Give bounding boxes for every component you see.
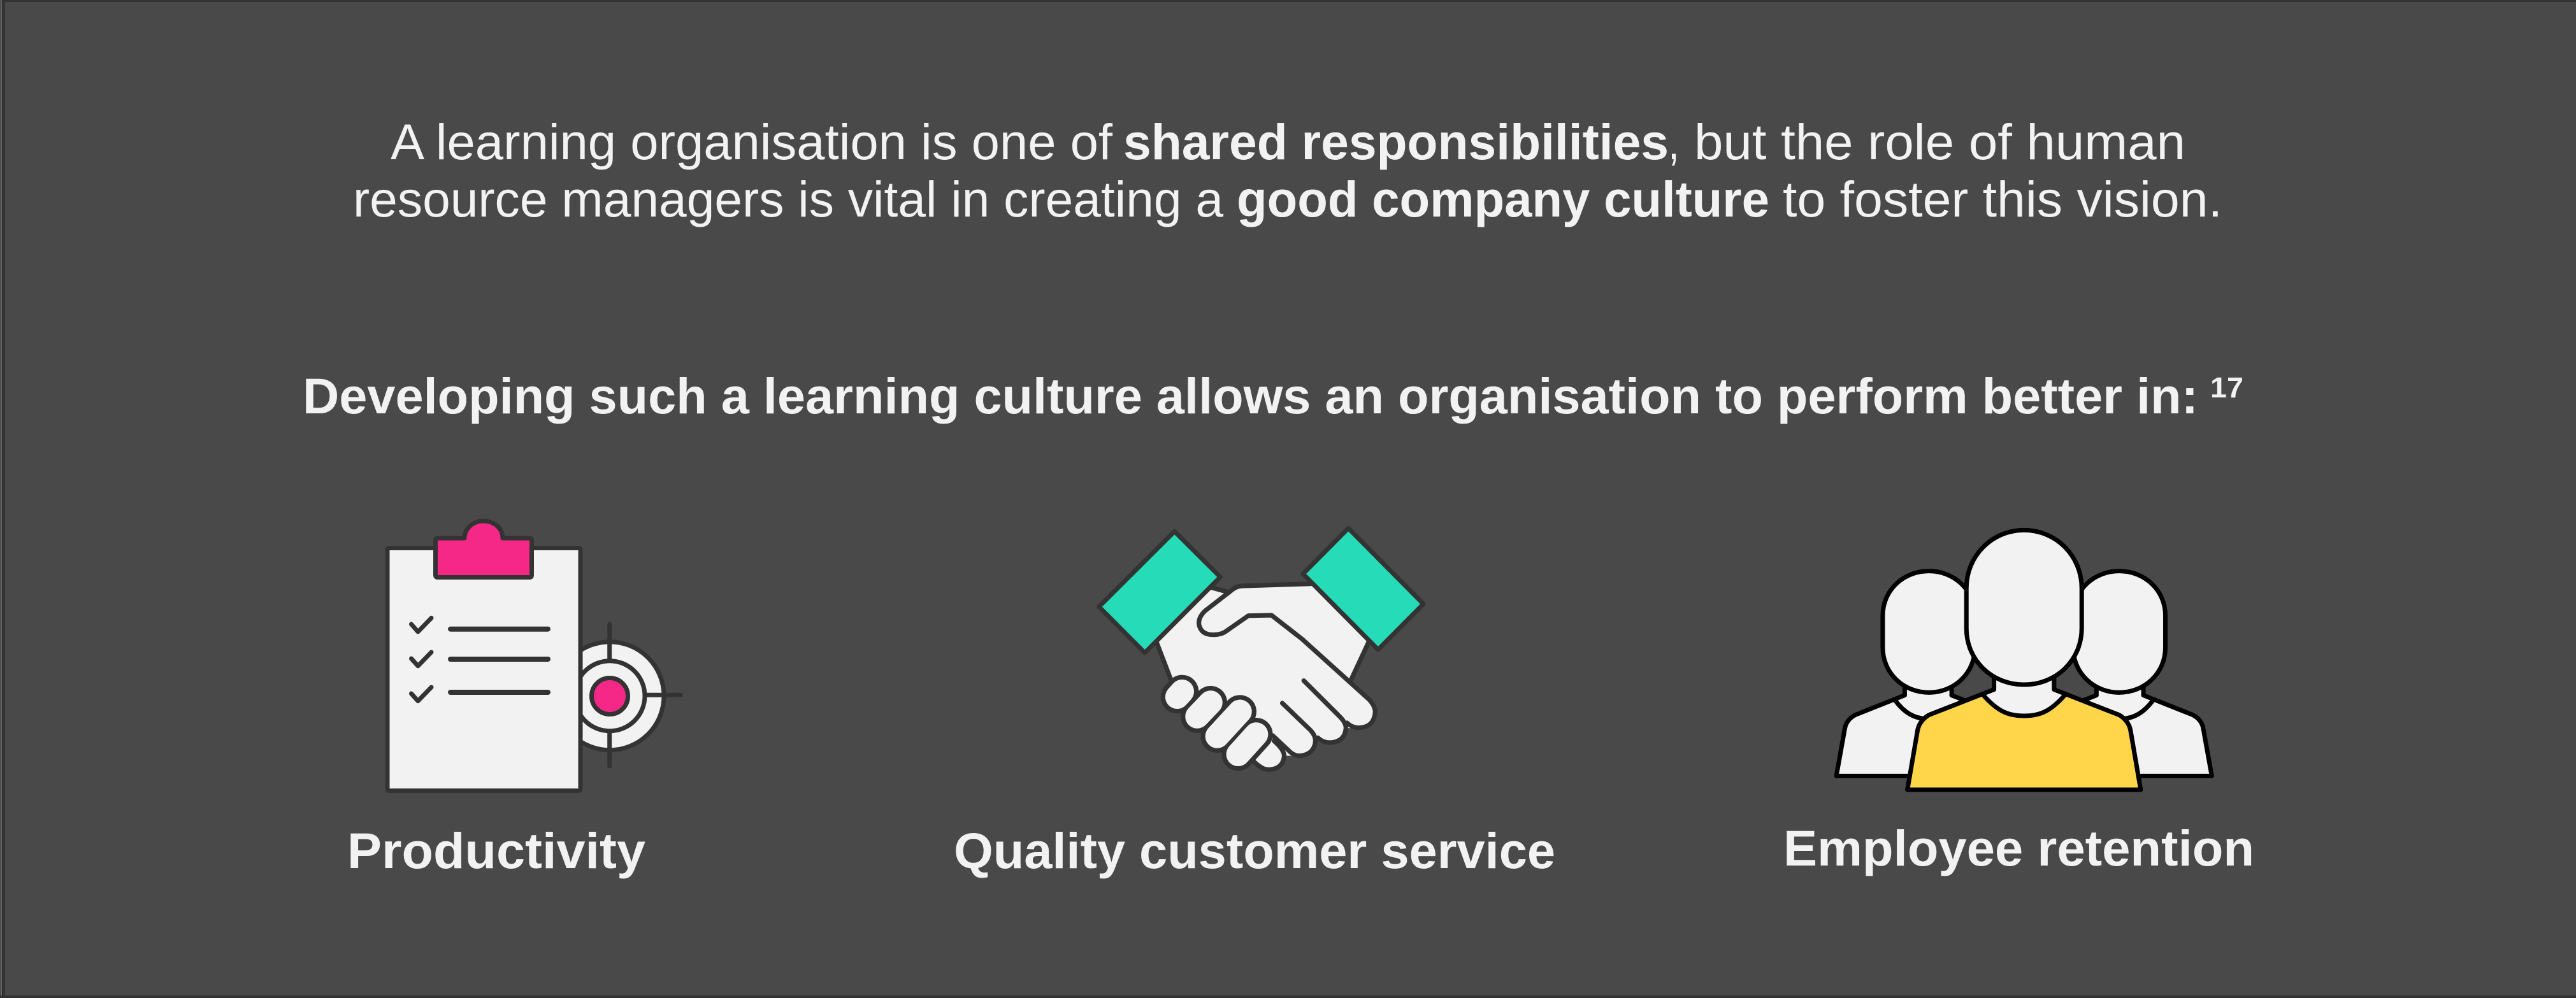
heading: Developing such a learning culture allows an organisation to perform better in: <box>303 368 2198 424</box>
intro text block: good company culture <box>1237 171 1769 227</box>
intro text block: to foster this vision. <box>1783 171 2222 227</box>
icon: clipboard with target <box>387 521 680 791</box>
label: Productivity: Productivity <box>347 823 645 879</box>
intro text block: , <box>1668 114 1680 170</box>
icon: three people <box>1836 530 2212 790</box>
intro text block: but the role of human <box>1694 114 2185 170</box>
heading: 17 <box>2210 371 2243 404</box>
intro text block: resource managers is vital in creating a <box>353 171 1223 227</box>
label: Employee retention: Employee retention <box>1783 820 2254 876</box>
icon: handshake <box>1099 528 1423 769</box>
label: Quality customer service: Quality customer service <box>954 823 1555 879</box>
intro text block: A learning organisation is one of <box>391 114 1112 170</box>
intro text block: shared responsibilities <box>1123 114 1669 170</box>
intro text block <box>353 114 2222 227</box>
